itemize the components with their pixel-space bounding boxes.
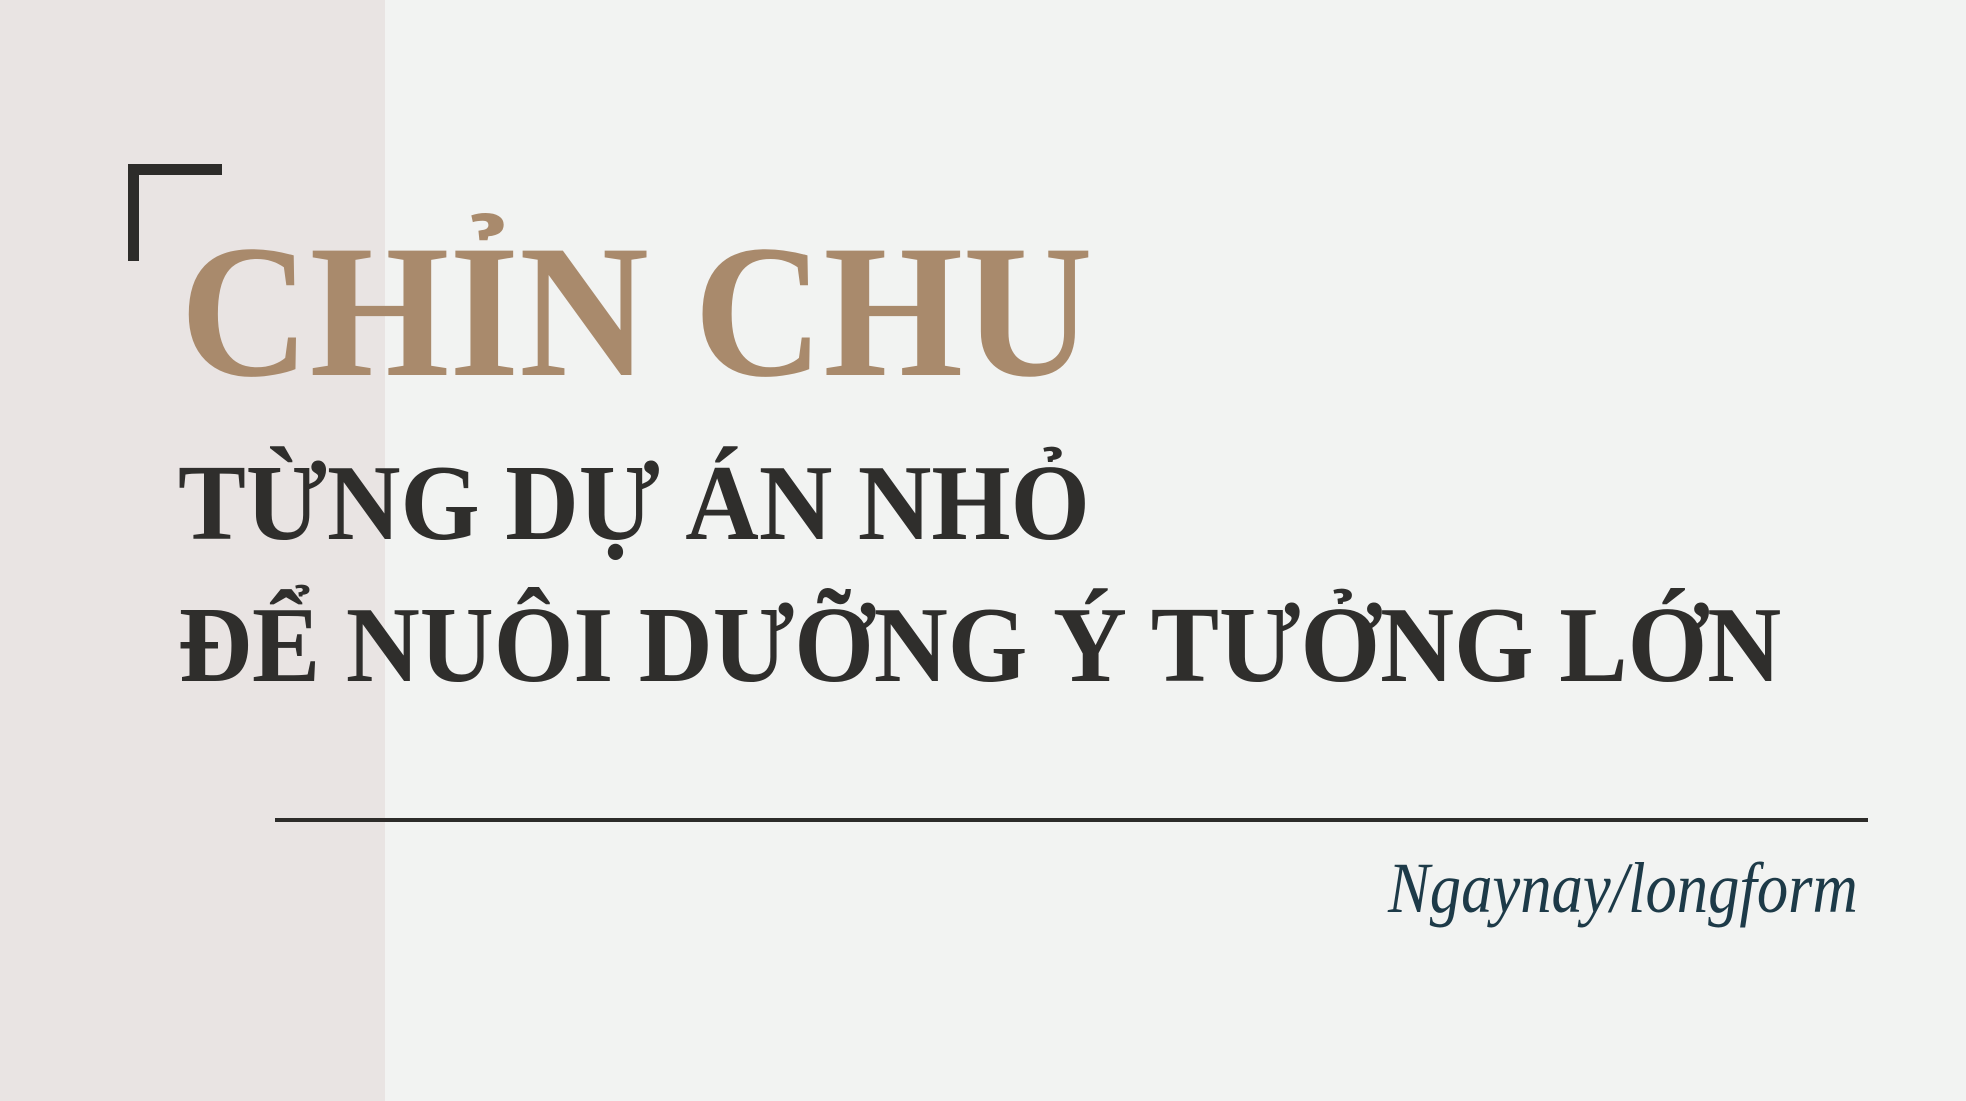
title line 3: ĐỂ NUÔI DƯỠNG Ý TƯỞNG LỚN [178, 586, 1781, 705]
corner bracket [128, 164, 222, 261]
signature: Ngaynay/longform [1388, 848, 1858, 928]
title line 1: CHỈN CHU [180, 207, 1093, 417]
left panel background [0, 0, 385, 1101]
divider line [275, 818, 1868, 822]
title line 2: TỪNG DỰ ÁN NHỎ [178, 444, 1090, 563]
